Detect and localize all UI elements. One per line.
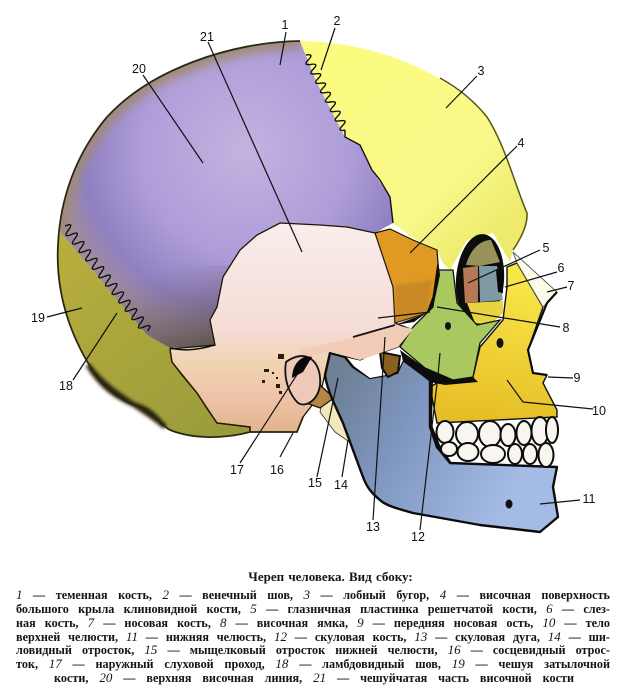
number labels: 16 xyxy=(270,463,284,477)
shadow: temporal fossa xyxy=(395,250,440,325)
bone: sphenoid xyxy=(375,229,438,323)
shading: sphenoid lower xyxy=(395,280,433,323)
number labels: 10 xyxy=(592,404,606,418)
shadow: mandible ramus edge xyxy=(429,380,452,463)
shadow: mandibular notch xyxy=(355,352,403,378)
teeth xyxy=(436,417,558,467)
number labels: 12 xyxy=(411,530,425,544)
mastoid process xyxy=(285,356,320,404)
skull outline back xyxy=(58,41,303,437)
number labels: 1 xyxy=(282,18,289,32)
caption legend: 1 — теменная кость, 2 — венечный шов, 3 — лобный бугор, 4 — височная поверхность xyxy=(16,587,610,602)
temporal sutures xyxy=(170,345,215,350)
shading: lower parietal xyxy=(120,265,230,348)
number labels xyxy=(31,14,606,544)
caption legend xyxy=(16,587,610,685)
number labels: 14 xyxy=(334,478,348,492)
bone: parietal xyxy=(60,41,393,348)
bone: zygomatic xyxy=(400,270,500,380)
number labels: 8 xyxy=(563,321,570,335)
caption legend: ток, 17 — наружный слуховой проход, 18 — ламбдовидный шов, 19 — чешуя затылочной xyxy=(16,656,610,671)
number labels: 21 xyxy=(200,30,214,44)
ear region xyxy=(262,354,320,404)
number labels: 2 xyxy=(334,14,341,28)
coronal suture lower xyxy=(345,130,393,223)
orbit floor xyxy=(467,301,503,325)
number labels: 7 xyxy=(568,279,575,293)
number labels: 20 xyxy=(132,62,146,76)
number labels: 5 xyxy=(543,241,550,255)
shadow: zygomatic lower edge xyxy=(400,350,478,385)
orbit cavity xyxy=(453,232,507,328)
number labels: 3 xyxy=(478,64,485,78)
number labels: 19 xyxy=(31,311,45,325)
lacrimal fossa xyxy=(496,270,503,293)
nasal aperture edge xyxy=(528,292,557,375)
caption title: Череп человека. Вид сбоку: xyxy=(248,569,413,584)
caption legend: ловидный отросток, 15 — мыщелковый отросток нижней челюсти, 16 — сосцевидный отрос- xyxy=(16,642,610,657)
coronoid process xyxy=(380,352,400,377)
coronal suture xyxy=(306,55,345,130)
leader lines xyxy=(47,28,593,530)
number labels: 9 xyxy=(574,371,581,385)
number labels: 15 xyxy=(308,476,322,490)
bone: mandible xyxy=(325,353,558,532)
infraorbital foramen xyxy=(496,338,504,348)
caption legend: кости, 20 — верхняя височная линия, 21 — чешуйчатая часть височной кости xyxy=(54,670,574,685)
caption legend: верхней челюсти, 11 — нижняя челюсть, 12 — скуловая кость, 13 — скуловая дуга, 14 — ши- xyxy=(16,629,610,644)
skull illustration xyxy=(31,14,606,544)
shading: occipital base xyxy=(88,365,165,427)
orbit back wall xyxy=(466,240,500,266)
styloid process xyxy=(320,400,350,441)
bone: maxilla xyxy=(430,263,557,423)
lacrimal bone xyxy=(479,266,503,302)
number labels: 11 xyxy=(583,492,596,506)
orbital plate xyxy=(463,266,478,303)
shading: parietal rim xyxy=(60,41,300,232)
lambdoid suture xyxy=(65,225,150,331)
orbit xyxy=(453,232,507,328)
number labels: 4 xyxy=(518,136,525,150)
bone: temporal squama xyxy=(170,223,413,432)
number labels: 13 xyxy=(366,520,380,534)
condyloid process xyxy=(309,384,334,408)
external auditory canal xyxy=(292,356,312,378)
number labels: 6 xyxy=(558,261,565,275)
zygomatic foramen xyxy=(445,322,451,330)
caption legend: большого крыла клиновидной кости, 5 — глазничная пластинка решетчатой кости, 6 — слез- xyxy=(16,601,610,616)
frontal outline front edge xyxy=(440,78,527,250)
number labels: 17 xyxy=(230,463,244,477)
mental foramen xyxy=(506,500,512,508)
nasal bone xyxy=(513,252,557,307)
number labels: 18 xyxy=(59,379,73,393)
bone: occipital xyxy=(58,232,250,437)
bone: frontal xyxy=(300,41,527,270)
caption legend: ная кость, 7 — носовая кость, 8 — височная ямка, 9 — передняя носовая ость, 10 — тело xyxy=(16,615,610,630)
zygomatic arch xyxy=(300,325,413,360)
vascular foramina xyxy=(262,354,284,394)
